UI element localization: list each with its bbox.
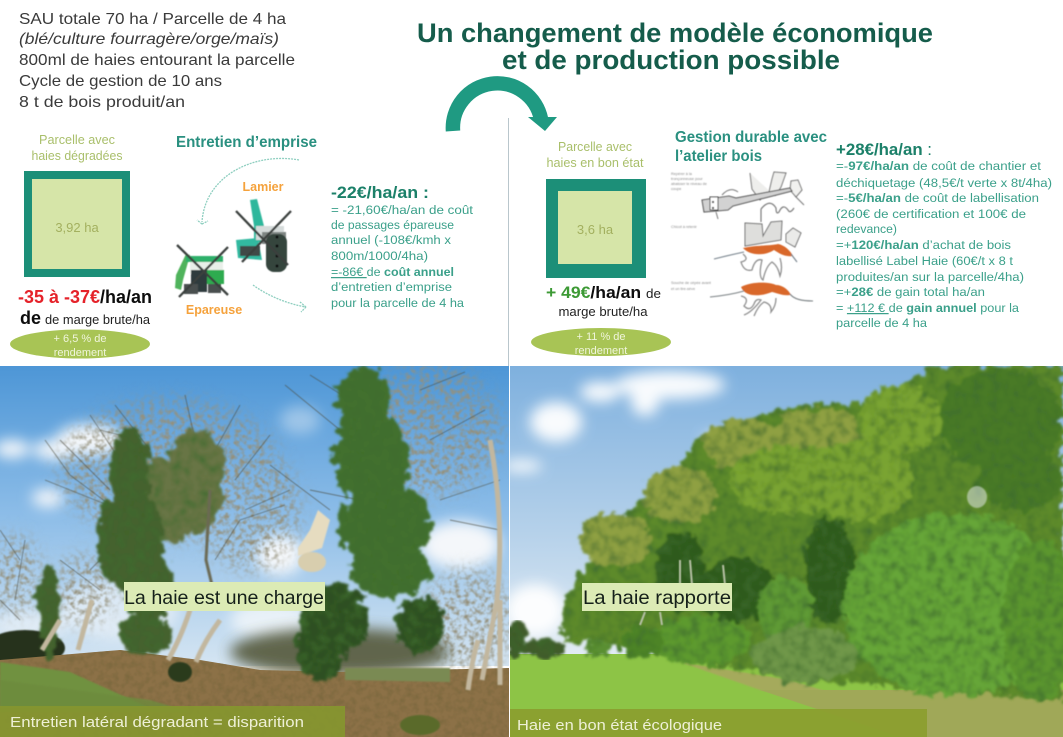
- label: lamier: Lamier: [242, 180, 284, 194]
- caption: healthy hedge: [510, 709, 927, 737]
- illustration: pollard stump cutting stages: [671, 172, 813, 316]
- text block: minus 22 euro maintenance: = -21,60€/ha/an de coût: [331, 203, 474, 217]
- heading: entretien d'emprise: Entretien d’emprise: [176, 134, 317, 151]
- illustration: pollard stump cutting stages: Souche de cépée avant: [671, 281, 712, 285]
- badge: yield plus 11 percent: rendement: [575, 345, 627, 357]
- text block: plus 28 euro gain: =+120€/ha/an d’achat de bois: [836, 238, 1011, 252]
- text block: farm facts: SAU totale 70 ha / Parcelle de 4 ha: [19, 11, 286, 28]
- icon: crossed-out epareuse tractor: [175, 245, 228, 297]
- ivy foliage: [36, 366, 444, 682]
- figure: gross margin loss: [18, 286, 152, 328]
- text block: plus 28 euro gain: labellisé Label Haie (60€/t x 8 t: [836, 254, 1014, 268]
- heading: parcel with degraded hedges: [32, 132, 123, 163]
- text block: farm facts: (blé/culture fourragère/orge/maïs): [19, 31, 279, 48]
- text block: farm facts: 8 t de bois produit/an: [19, 94, 185, 111]
- distant dark treeline: [0, 628, 66, 660]
- heading: parcel with degraded hedges: haies dégradées: [32, 148, 123, 163]
- text block: plus 28 euro gain: [836, 141, 1052, 330]
- text block: farm facts: [19, 11, 295, 111]
- label: epareuse: Epareuse: [186, 303, 242, 317]
- illustration: pollard stump cutting stages: et un tire-sève: [671, 287, 695, 291]
- badge: yield plus 6.5 percent: [10, 330, 150, 359]
- figure: gross margin gain: [546, 283, 661, 319]
- caption: healthy hedge: Haie en bon état écologique: [517, 717, 722, 734]
- field: [510, 654, 1063, 737]
- text block: farm facts: 800ml de haies entourant la parcelle: [19, 52, 295, 69]
- panel: right-of-way maintenance: [175, 134, 317, 317]
- figure: gross margin loss: -35 à -37€/ha/an: [18, 286, 152, 307]
- badge: yield plus 11 percent: + 11 % de: [576, 331, 626, 343]
- text block: plus 28 euro gain: =-5€/ha/an de coût de labellisation: [836, 191, 1039, 205]
- text block: plus 28 euro gain: parcelle de 4 ha: [836, 316, 927, 330]
- illustration: pollard stump cutting stages: Chicot à retenir: [671, 225, 697, 229]
- heading: parcel with healthy hedges: haies en bon état: [546, 156, 644, 170]
- figure: gross margin loss: de: [20, 308, 41, 328]
- title: [417, 18, 933, 75]
- arrow: dotted curve to result: [253, 285, 306, 312]
- text block: plus 28 euro gain: produites/an sur la parcelle/4ha): [836, 270, 1024, 284]
- panel: sustainable management: [671, 129, 827, 316]
- text block: plus 28 euro gain: (260€ de certification et 100€ de: [836, 207, 1026, 221]
- heading: gestion durable: l’atelier bois: [675, 148, 762, 165]
- badge: yield plus 11 percent: [531, 328, 671, 357]
- text block: minus 22 euro maintenance: =-86€ de coût annuel: [331, 265, 454, 279]
- heading: -22€/ha/an: -22€/ha/an :: [331, 183, 429, 202]
- title: et de production possible: [502, 45, 840, 75]
- diagram: parcel square 3.92 ha: 3,92 ha: [55, 220, 99, 235]
- illustration: pollard stump cutting stages: Repérer à la: [671, 172, 693, 176]
- cut stump and pale trunks: [42, 440, 500, 690]
- text block: minus 22 euro maintenance: annuel (-108€/kmh x: [331, 233, 452, 247]
- title: Un changement de modèle économique: [417, 18, 933, 48]
- text block: minus 22 euro maintenance: 800m/1000/4ha): [331, 249, 428, 263]
- heading: parcel with healthy hedges: Parcelle avec: [558, 140, 632, 154]
- heading: parcel with healthy hedges: [546, 140, 644, 170]
- badge: yield plus 6.5 percent: + 6,5 % de: [54, 333, 106, 345]
- label: la haie est une charge: La haie est une charge: [124, 587, 324, 609]
- sky gap: [967, 486, 987, 508]
- text block: plus 28 euro gain: =+28€ de gain total ha/an: [836, 285, 985, 299]
- panel: good-condition hedge parcel: [531, 140, 671, 357]
- illustration: pollard stump cutting stages: abaisser le niveau de: [671, 182, 707, 186]
- tree canopy: [563, 365, 1063, 700]
- arrow: dotted curve to epareuse: [197, 158, 299, 224]
- heading: gestion durable: Gestion durable avec: [675, 129, 827, 146]
- caption: degrading side maintenance: Entretien latéral dégradant = disparition: [10, 714, 304, 731]
- diagram: parcel square 3.6 ha: [546, 179, 646, 278]
- text block: minus 22 euro maintenance: [331, 183, 474, 310]
- figure: gross margin gain: + 49€/ha/an de: [546, 283, 661, 302]
- photo: healthy hedge: [502, 365, 1063, 737]
- icon: crossed-out lamier machine: [236, 199, 291, 272]
- text block: plus 28 euro gain: =-97€/ha/an de coût de chantier et: [836, 159, 1042, 173]
- heading: parcel with degraded hedges: Parcelle avec: [39, 132, 115, 147]
- illustration: pollard stump cutting stages: tronçonneuse pour: [671, 177, 703, 181]
- text block: minus 22 euro maintenance: pour la parcelle de 4 ha: [331, 296, 464, 310]
- text block: farm facts: Cycle de gestion de 10 ans: [19, 73, 222, 90]
- ground: [0, 650, 509, 737]
- divider: [508, 118, 510, 366]
- diagram: parcel square 3.92 ha: [24, 171, 130, 277]
- illustration: pollard stump cutting stages: coupe: [671, 187, 681, 191]
- label: la haie rapporte: La haie rapporte: [583, 587, 731, 609]
- panel: degraded hedge parcel: [10, 132, 152, 359]
- distant trees: [504, 622, 567, 658]
- heading: gestion durable: [675, 129, 827, 165]
- branches: [0, 372, 500, 620]
- text block: plus 28 euro gain: déchiquetage (48,5€/t verte x 8t/4ha): [836, 176, 1052, 190]
- badge: yield plus 6.5 percent: rendement: [54, 347, 106, 359]
- text block: plus 28 euro gain: redevance): [836, 222, 897, 236]
- bare canopy: [0, 365, 515, 670]
- arrow: left to right transition: [453, 83, 557, 131]
- figure: gross margin gain: marge brute/ha: [558, 305, 648, 319]
- figure: gross margin loss: de marge brute/ha: [45, 312, 151, 327]
- caption: degrading side maintenance: [0, 706, 345, 737]
- text block: plus 28 euro gain: = +112 € de gain annuel pour la: [836, 301, 1019, 315]
- text block: minus 22 euro maintenance: d’entretien d’emprise: [331, 280, 452, 294]
- shrubs: [586, 513, 1063, 700]
- diagram: parcel square 3.6 ha: 3,6 ha: [577, 222, 614, 237]
- photo: degraded hedge: [0, 365, 515, 737]
- heading: +28€/ha/an: +28€/ha/an :: [836, 141, 932, 159]
- text block: minus 22 euro maintenance: de passages épareuse: [331, 218, 454, 232]
